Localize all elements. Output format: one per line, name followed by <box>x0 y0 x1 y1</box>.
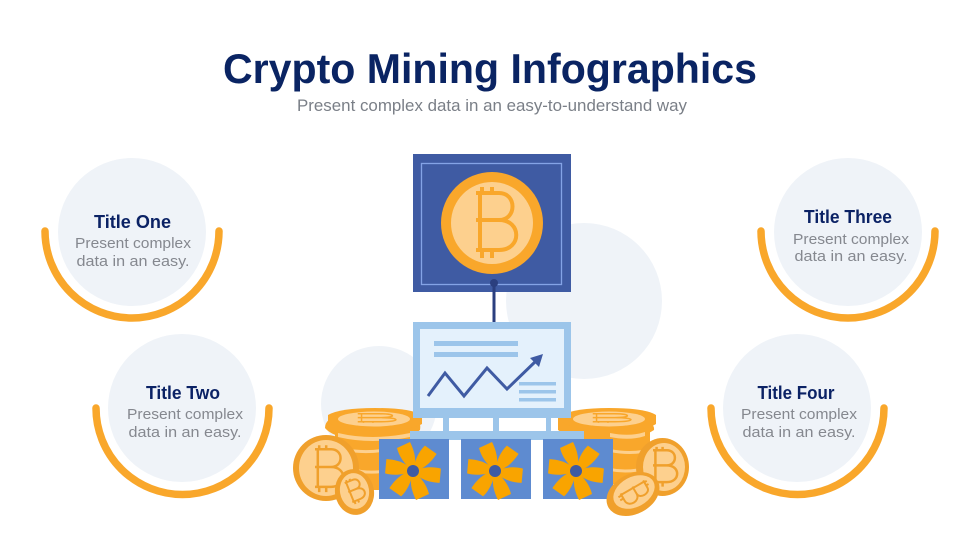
chart screen <box>413 322 571 418</box>
panel: title one: Present complex <box>75 235 192 252</box>
panel: title four: data in an easy. <box>742 424 856 441</box>
panel: title three: Title Three <box>804 207 892 227</box>
subtitle: Present complex data in an easy-to-understand way <box>297 96 687 115</box>
icon: fan two <box>461 439 531 500</box>
panel: title four: Present complex <box>741 406 858 423</box>
panel: title three: Present complex <box>793 231 910 248</box>
icon: coin stack right <box>558 408 656 484</box>
panel: title two <box>96 334 269 494</box>
icon: small coin left <box>331 466 378 518</box>
panel: title four <box>711 334 884 494</box>
panel: title three <box>761 158 935 318</box>
panel: title three: data in an easy. <box>794 248 908 265</box>
background circle: small <box>321 346 437 462</box>
screen stand <box>410 418 584 440</box>
panel: title one: Title One <box>94 212 171 232</box>
panel: title one: data in an easy. <box>76 253 190 270</box>
icon: large coin left <box>293 435 359 501</box>
panel: title two: Title Two <box>146 383 220 403</box>
background circle: large <box>506 223 662 379</box>
icon: fan three <box>543 439 613 500</box>
connector line <box>490 279 498 326</box>
panel: title two: data in an easy. <box>128 424 242 441</box>
icon: bitcoin sign panel <box>413 154 571 292</box>
icon: large coin right <box>636 438 689 496</box>
panel: title four: Title Four <box>758 383 834 403</box>
icon: fan one <box>379 439 449 500</box>
icon: small coin right <box>599 463 667 525</box>
panel: title one <box>45 158 219 318</box>
title: Crypto Mining Infographics <box>223 45 757 92</box>
icon: coin stack left <box>325 408 422 490</box>
panel: title two: Present complex <box>127 406 244 423</box>
